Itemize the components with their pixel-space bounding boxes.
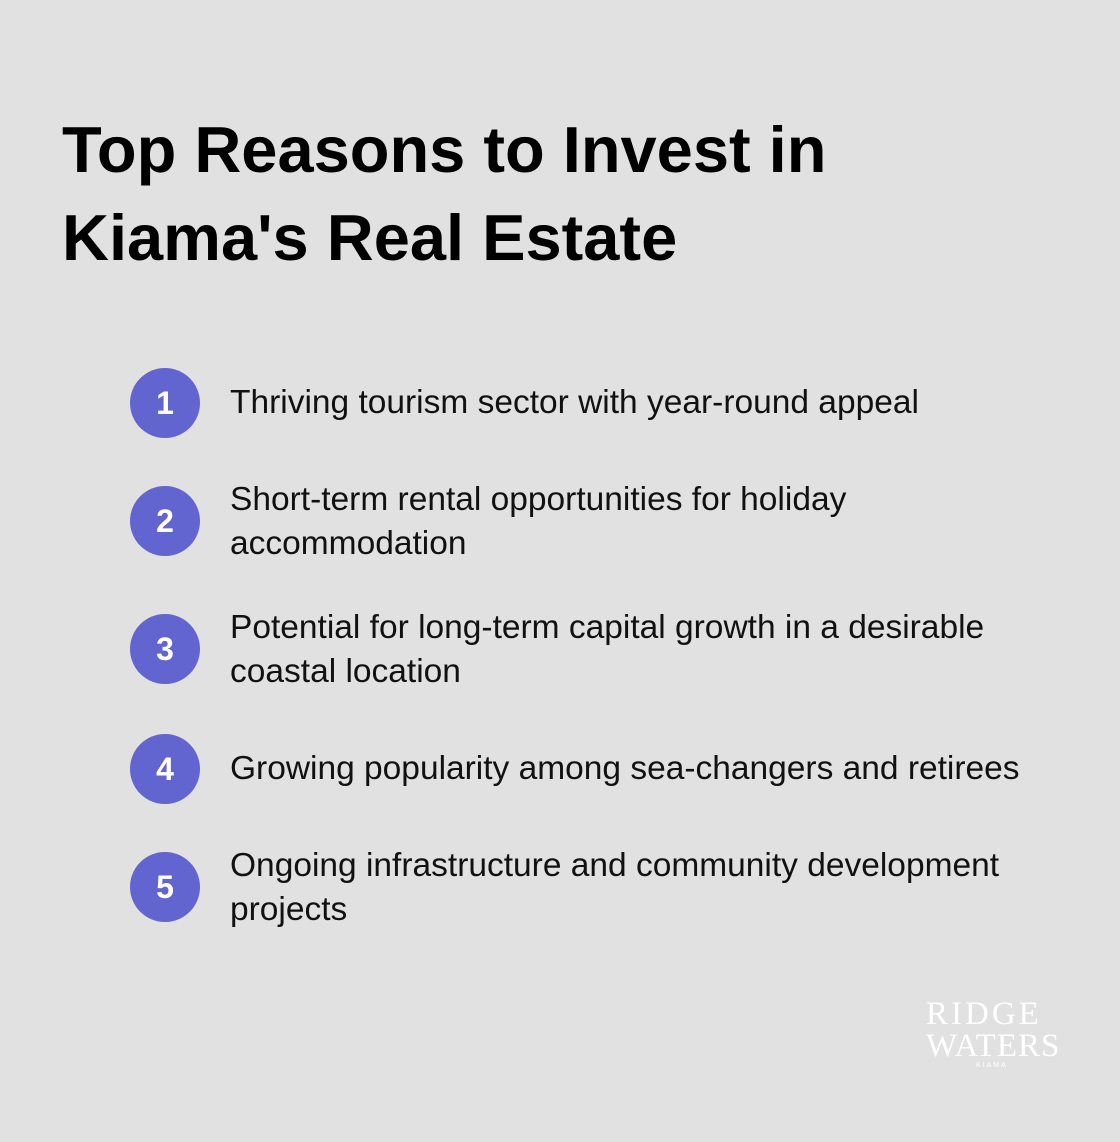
item 2: 2 — [156, 503, 174, 539]
title: Top Reasons to Invest in — [62, 113, 826, 186]
item 1 — [130, 368, 919, 438]
item 2: accommodation — [230, 525, 466, 562]
item 3: Potential for long-term capital growth in a desirable — [230, 609, 984, 646]
item 3: coastal location — [230, 653, 461, 690]
item 4 — [130, 734, 1020, 804]
item 2 — [130, 481, 846, 562]
item 1: 1 — [156, 385, 174, 421]
item 4: Growing popularity among sea-changers and retirees — [230, 750, 1020, 787]
logo: KIAMA — [976, 1062, 1008, 1069]
item 5: projects — [230, 891, 347, 928]
item 5: Ongoing infrastructure and community development — [230, 847, 999, 884]
logo: RIDGE — [926, 996, 1042, 1032]
logo — [926, 996, 1060, 1069]
item 4: 4 — [156, 751, 174, 787]
title: Kiama's Real Estate — [62, 201, 677, 274]
item 5 — [130, 847, 999, 928]
logo: WATERS — [926, 1028, 1060, 1064]
title — [62, 113, 826, 274]
item 2: Short-term rental opportunities for holiday — [230, 481, 846, 518]
item 1: Thriving tourism sector with year-round appeal — [230, 384, 919, 421]
item 3: 3 — [156, 631, 174, 667]
item 3 — [130, 609, 984, 690]
item 5: 5 — [156, 869, 174, 905]
